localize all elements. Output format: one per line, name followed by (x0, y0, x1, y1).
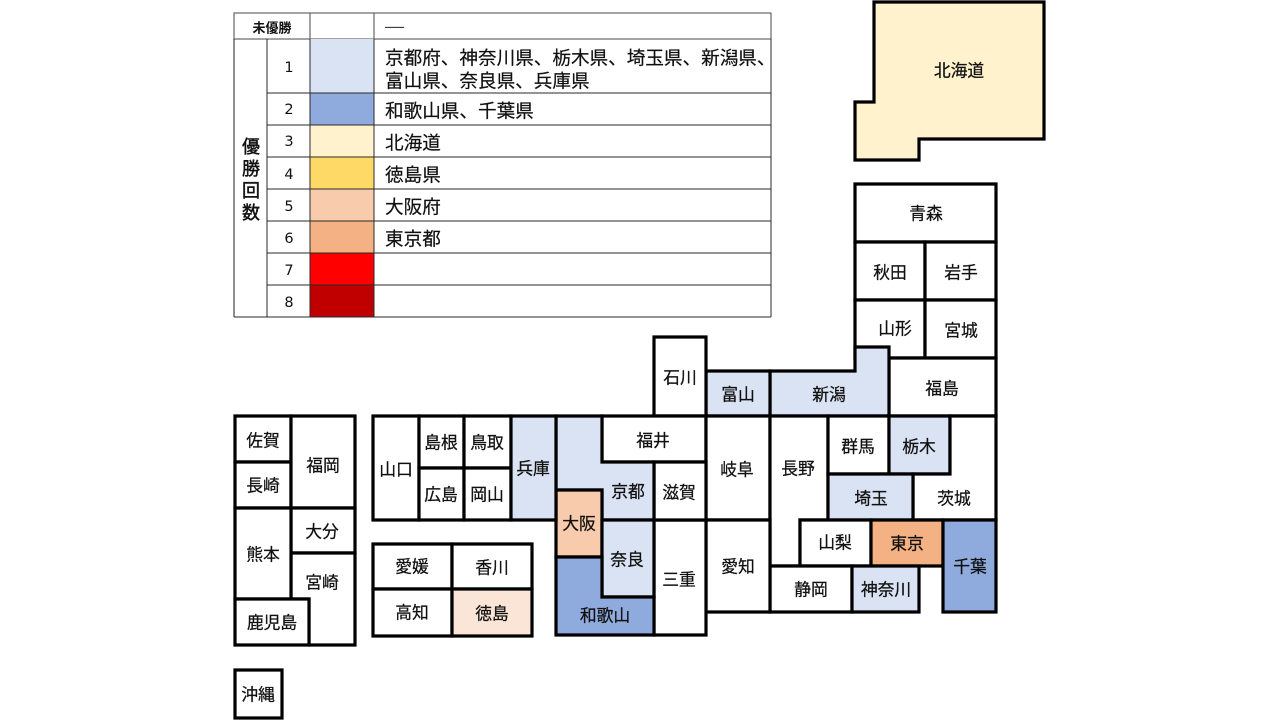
Nagano: 長野 (781, 460, 815, 478)
Kumamoto: 熊本 (246, 546, 280, 564)
legend row 3 (284, 125, 441, 157)
Tottori (464, 416, 511, 468)
legend row 5: 大阪府 (385, 196, 441, 218)
Mie (654, 520, 706, 635)
legend side heading: 優勝回数 (234, 39, 260, 317)
legend row 1: 1 (284, 60, 294, 76)
legend row 1: 京都府、神奈川県、栃木県、埼玉県、新潟県、 (385, 48, 775, 68)
legend row 1: 富山県、奈良県、兵庫県 (385, 70, 590, 92)
Toyama: 富山 (721, 386, 755, 404)
Shimane (419, 416, 464, 468)
legend row 6 (284, 221, 441, 253)
legend row 8 (284, 285, 374, 317)
Okinawa (235, 670, 282, 718)
Hyogo: 兵庫 (516, 460, 550, 478)
legend row 5 (284, 189, 441, 221)
Saitama: 埼玉 (854, 490, 888, 508)
Osaka (556, 490, 602, 557)
Yamagata: 山形 (878, 320, 912, 338)
Nagasaki (235, 462, 291, 508)
Yamanashi: 山梨 (818, 534, 852, 552)
legend row 2: 2 (284, 102, 294, 118)
Aichi (706, 520, 770, 612)
Akita (855, 242, 925, 300)
legend row: no championship (234, 13, 771, 39)
legend row 2: 和歌山県、千葉県 (385, 100, 534, 122)
Okinawa: 沖縄 (241, 686, 275, 704)
Shizuoka (770, 566, 852, 612)
Okayama (464, 468, 511, 520)
Nara: 奈良 (610, 550, 644, 570)
Ishikawa (654, 337, 706, 416)
legend row 3: 北海道 (385, 132, 441, 154)
Kochi (373, 589, 452, 636)
legend side heading: 優勝回数: 勝 (242, 159, 260, 179)
Kagoshima: 鹿児島 (247, 614, 297, 632)
Shiga (654, 462, 706, 520)
Gifu: 岐阜 (720, 460, 754, 480)
legend row 6: 6 (284, 231, 294, 247)
Fukushima (889, 358, 996, 416)
Hokkaido (855, 2, 1044, 160)
Nagasaki: 長崎 (246, 476, 280, 496)
Fukushima: 福島 (925, 380, 959, 398)
Kochi: 高知 (395, 604, 429, 622)
Fukuoka: 福岡 (306, 456, 340, 476)
Okayama: 岡山 (470, 486, 504, 504)
Fukui (602, 416, 706, 462)
Tochigi (889, 416, 950, 474)
Tochigi: 栃木 (902, 438, 936, 456)
Iwate (925, 242, 996, 300)
Nagano (770, 416, 828, 566)
Hyogo (511, 416, 556, 520)
map: Japan prefectures (235, 2, 1044, 718)
Yamaguchi: 山口 (379, 460, 413, 480)
Kyoto (556, 416, 654, 520)
legend row 6: 東京都 (385, 228, 441, 250)
Yamanashi (800, 520, 871, 566)
legend row 5: 5 (284, 199, 294, 215)
legend row 4: 徳島県 (385, 164, 441, 186)
Chiba: 千葉 (953, 558, 987, 576)
Wakayama: 和歌山 (580, 606, 630, 626)
legend row 1 (284, 39, 775, 93)
Yamagata (855, 300, 925, 358)
Oita: 大分 (305, 522, 339, 542)
Kanagawa: 神奈川 (861, 580, 911, 600)
Gunma (828, 416, 889, 474)
legend side heading: 優勝回数: 数 (242, 203, 260, 223)
Tokyo (871, 520, 943, 566)
Hiroshima: 広島 (424, 486, 458, 504)
Tokyo: 東京 (890, 534, 924, 554)
legend row 8: 8 (284, 295, 294, 311)
Aichi: 愛知 (721, 558, 755, 576)
Mie: 三重 (662, 570, 696, 590)
legend row 7 (284, 253, 374, 285)
Kumamoto (235, 508, 291, 599)
Iwate: 岩手 (944, 264, 978, 282)
Ehime: 愛媛 (395, 558, 429, 576)
Tokushima (452, 589, 532, 636)
Kanagawa (852, 566, 919, 612)
Ibaraki (913, 416, 996, 520)
Nara (602, 520, 654, 597)
Shiga: 滋賀 (662, 484, 696, 502)
Tottori: 鳥取 (470, 434, 504, 452)
Aomori (855, 184, 996, 242)
Akita: 秋田 (873, 264, 907, 282)
Osaka: 大阪 (562, 514, 596, 534)
Saga (235, 416, 291, 462)
Miyagi (925, 300, 996, 358)
Kagawa: 香川 (475, 558, 509, 578)
Yamaguchi (373, 416, 419, 520)
Wakayama (556, 557, 654, 635)
legend row: no championship: 未優勝 (252, 20, 292, 36)
Ibaraki: 茨城 (937, 490, 971, 508)
Chiba (943, 520, 996, 612)
Miyazaki (291, 553, 355, 645)
Oita (291, 508, 355, 553)
Aomori: 青森 (909, 204, 943, 224)
Miyagi: 宮城 (944, 322, 978, 340)
Hiroshima (419, 468, 464, 520)
legend side heading: 優勝回数: 回 (242, 181, 260, 201)
legend row 3: 3 (284, 134, 294, 150)
Ehime (373, 544, 452, 589)
Gifu (706, 416, 770, 520)
Ishikawa: 石川 (663, 368, 697, 388)
legend side heading: 優勝回数: 優 (242, 137, 260, 157)
legend table: championship counts (234, 13, 775, 317)
Gunma: 群馬 (841, 438, 875, 456)
Miyazaki: 宮崎 (305, 574, 339, 592)
Saga: 佐賀 (246, 432, 280, 450)
Kyoto: 京都 (611, 482, 645, 502)
Fukuoka (291, 416, 355, 508)
Niigata (770, 347, 889, 416)
legend row 4 (284, 157, 441, 189)
legend row 2 (284, 93, 534, 125)
legend row: no championship: —— (385, 22, 404, 32)
Hokkaido: 北海道 (934, 62, 984, 80)
Saitama (828, 474, 913, 520)
Kagoshima (235, 599, 309, 645)
legend row 4: 4 (284, 167, 294, 183)
Shimane: 島根 (424, 434, 458, 452)
legend row 7: 7 (284, 263, 294, 279)
Shizuoka: 静岡 (794, 580, 828, 600)
Toyama (706, 371, 770, 416)
Niigata: 新潟 (812, 386, 846, 404)
Tokushima: 徳島 (475, 604, 509, 624)
Kagawa (452, 544, 532, 589)
Fukui: 福井 (636, 432, 670, 450)
